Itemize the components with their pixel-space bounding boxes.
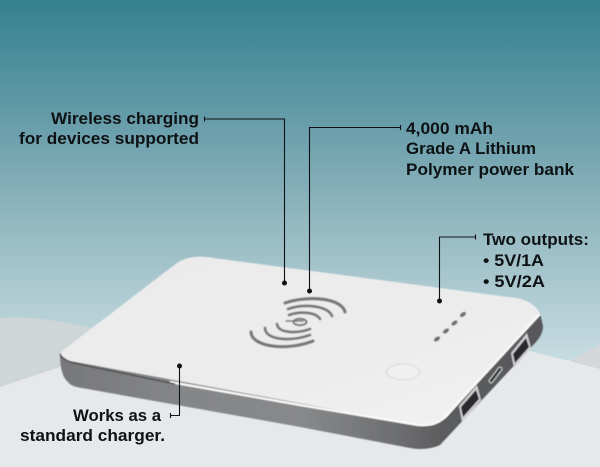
leader line — [170, 366, 180, 418]
callout text: • 5V/2A — [483, 272, 545, 291]
callout: standard charger — [20, 364, 182, 445]
micro usb port opening — [491, 369, 500, 381]
callout text: for devices supported — [19, 129, 199, 148]
callout text — [19, 109, 199, 148]
callout text: • 5V/1A — [483, 251, 544, 270]
callout text: standard charger. — [20, 426, 165, 445]
callout text: Polymer power bank — [406, 160, 575, 179]
background hill right — [560, 344, 600, 385]
leader dot — [307, 288, 312, 294]
usb port left — [459, 385, 481, 422]
callout text: Grade A Lithium — [406, 139, 536, 158]
power button — [386, 364, 420, 380]
leader line — [204, 116, 284, 283]
leader line — [310, 125, 400, 291]
chrome edge highlight — [170, 314, 540, 425]
device top surface — [61, 257, 540, 425]
callout: wireless charging — [19, 109, 287, 286]
leader dot — [177, 364, 182, 368]
background hill left — [0, 318, 170, 400]
dark left edge shadow — [60, 354, 175, 384]
callout text: Wireless charging — [51, 109, 199, 128]
floor — [0, 351, 600, 467]
callout text — [483, 230, 589, 291]
callout text: Works as a — [73, 406, 162, 425]
indicator leds — [433, 311, 467, 343]
callout text: 4,000 mAh — [406, 119, 493, 138]
leader dot — [437, 298, 442, 304]
power bank device — [60, 257, 543, 449]
usb port right — [511, 333, 531, 368]
callout text: Two outputs: — [483, 230, 589, 249]
device metal side — [60, 313, 543, 449]
callout text — [406, 119, 575, 179]
callout: battery capacity — [307, 119, 575, 294]
icon: wireless charging symbol — [251, 299, 345, 347]
leader line — [440, 234, 476, 301]
leader dot — [282, 280, 287, 286]
callout text — [20, 406, 165, 445]
micro usb port — [491, 369, 500, 381]
callout: two outputs — [437, 230, 589, 304]
background sky gradient — [0, 0, 600, 360]
